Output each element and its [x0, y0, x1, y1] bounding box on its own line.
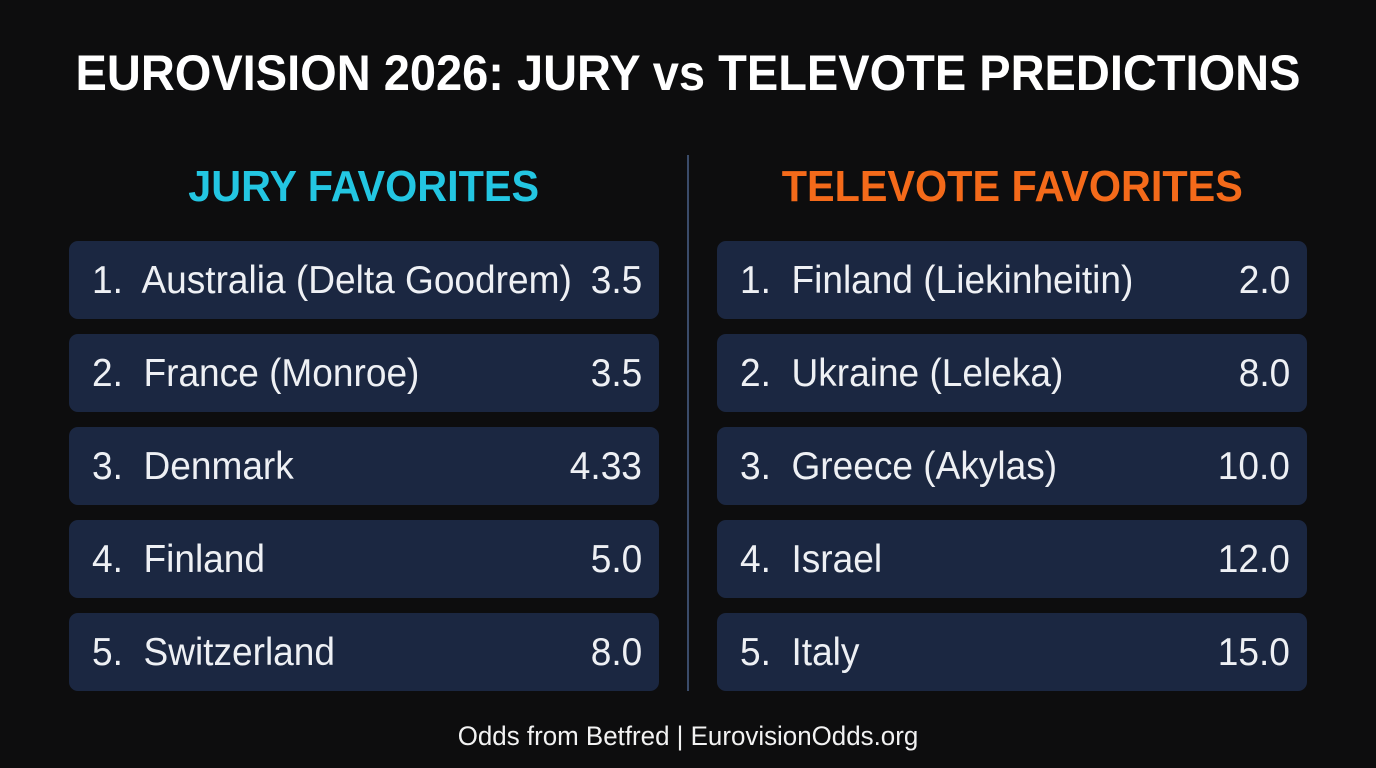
- row jury 4: 5.0: [590, 538, 642, 581]
- footer source: Odds from Betfred | EurovisionOdds.org: [458, 721, 918, 751]
- row televote 5: 5. Italy: [740, 631, 859, 674]
- row televote 1: [717, 241, 1307, 319]
- row televote 2: [717, 334, 1307, 412]
- panel: televote list: [717, 241, 1307, 691]
- row televote 2: 2. Ukraine (Leleka): [740, 352, 1063, 395]
- row jury 2: 3.5: [590, 352, 642, 395]
- row jury 1: 3.5: [590, 259, 642, 302]
- row jury 5: 5. Switzerland: [92, 631, 335, 674]
- row jury 5: 8.0: [590, 631, 642, 674]
- row jury 2: [69, 334, 659, 412]
- row jury 4: 4. Finland: [92, 538, 265, 581]
- row jury 1: [69, 241, 659, 319]
- row jury 2: 2. France (Monroe): [92, 352, 419, 395]
- row jury 3: 3. Denmark: [92, 445, 294, 488]
- row televote 1: 1. Finland (Liekinheitin): [740, 259, 1133, 302]
- row televote 5: 15.0: [1218, 631, 1290, 674]
- row televote 4: [717, 520, 1307, 598]
- row televote 1: 2.0: [1238, 259, 1290, 302]
- row televote 2: 8.0: [1238, 352, 1290, 395]
- row televote 4: 12.0: [1218, 538, 1290, 581]
- row jury 3: [69, 427, 659, 505]
- row televote 3: 10.0: [1218, 445, 1290, 488]
- row jury 4: [69, 520, 659, 598]
- row televote 5: [717, 613, 1307, 691]
- heading: jury favorites: JURY FAVORITES: [189, 162, 539, 211]
- heading: televote favorites: TELEVOTE FAVORITES: [781, 162, 1243, 211]
- panel: jury list: [69, 241, 659, 691]
- row televote 3: [717, 427, 1307, 505]
- row televote 4: 4. Israel: [740, 538, 882, 581]
- title: EUROVISION 2026: JURY vs TELEVOTE PREDICTIONS: [76, 45, 1300, 101]
- row jury 3: 4.33: [570, 445, 642, 488]
- row jury 5: [69, 613, 659, 691]
- row jury 1: 1. Australia (Delta Goodrem): [92, 259, 572, 302]
- row televote 3: 3. Greece (Akylas): [740, 445, 1057, 488]
- divider: [687, 155, 689, 691]
